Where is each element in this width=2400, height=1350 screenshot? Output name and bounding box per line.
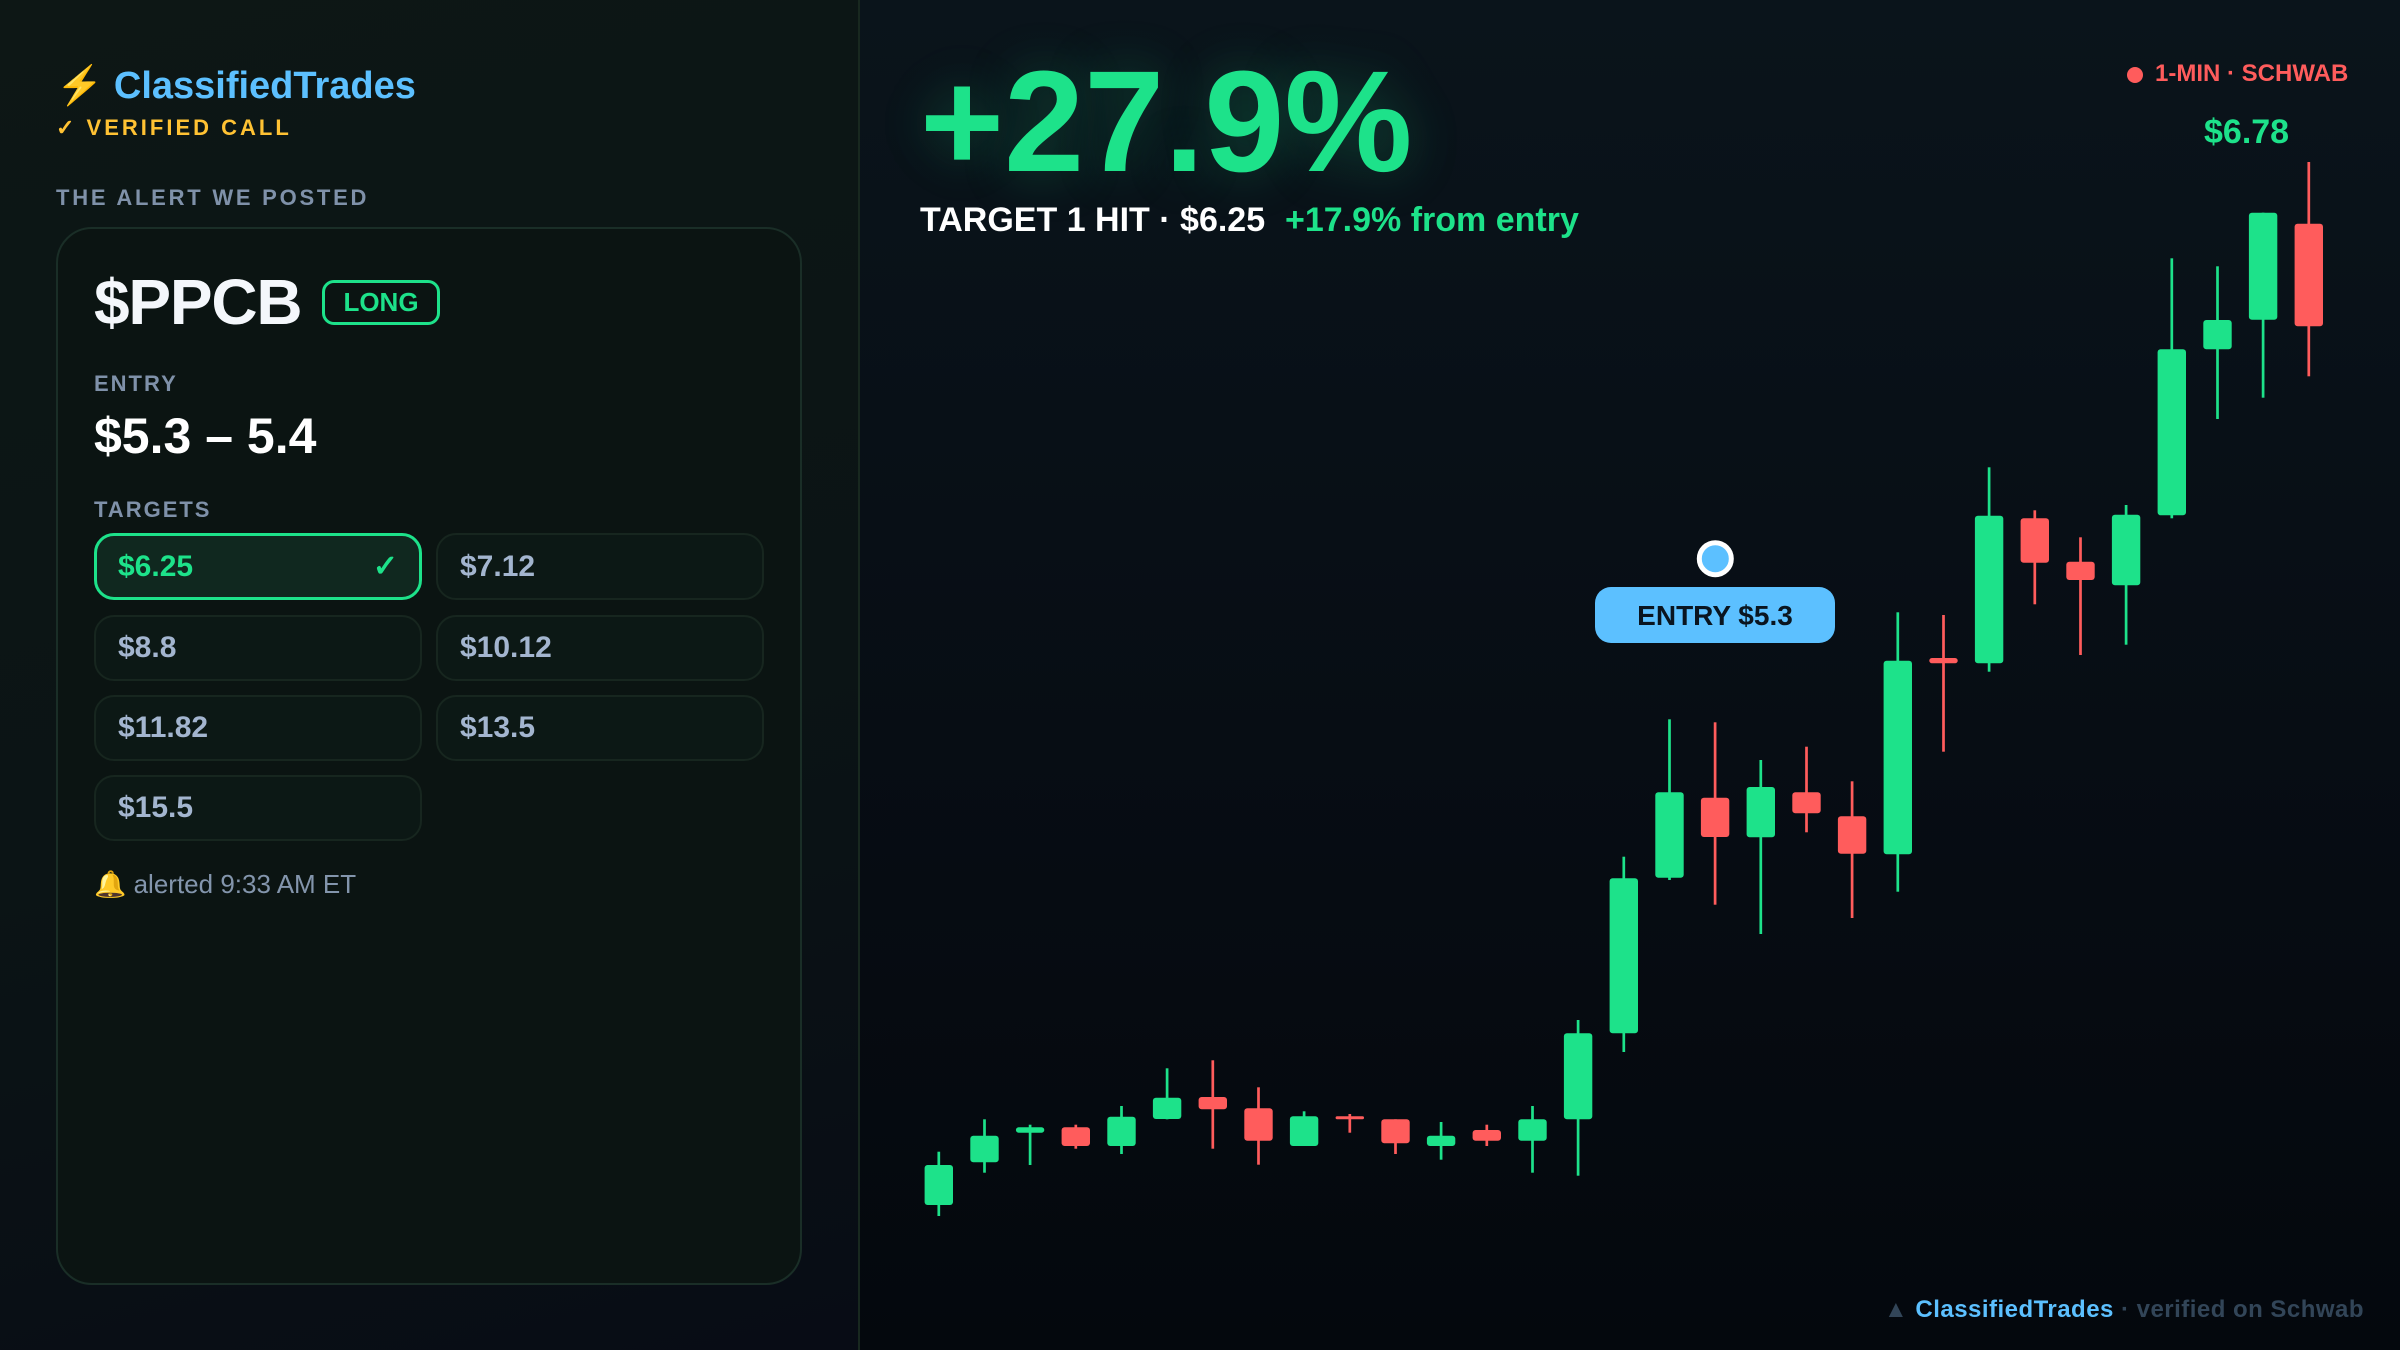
alert time: 🔔 alerted 9:33 AM ET [94,869,356,899]
target hit line: TARGET 1 HIT · $6.25 [920,201,1265,239]
panel: alert card [56,227,802,1285]
target 7 [94,775,422,841]
target 2 [436,533,764,600]
target 3 [94,615,422,681]
target 6: $13.5 [460,710,535,744]
green candles [925,213,2277,1216]
entry price label [1595,587,1835,643]
target 6 [436,695,764,761]
targets label: TARGETS [94,497,211,522]
gain from entry: +17.9% from entry [1285,201,1579,239]
entry label: ENTRY [94,371,178,396]
entry value: $5.3 – 5.4 [94,408,316,464]
target 1: hit: ✓ [373,550,398,583]
target 3: $8.8 [118,630,176,664]
badge: long: LONG [343,286,419,316]
entry marker dot [1699,543,1731,575]
headline gain: +27.9% [920,41,1412,202]
red candles [1062,162,2323,1165]
target 4: $10.12 [460,630,552,664]
icon: live dot [2127,67,2143,83]
verified call tag: ✓ VERIFIED CALL [56,115,292,140]
right stage background [858,0,2400,1350]
target 1: hit [94,533,422,600]
source tag: 1-MIN · SCHWAB [2155,60,2348,87]
footer credit: ▲ ClassifiedTrades · verified on Schwab [1884,1296,2364,1323]
target 4 [436,615,764,681]
target 5 [94,695,422,761]
badge: long [322,280,440,325]
target 1: hit: $6.25 [118,550,193,583]
last price: $6.78 [2204,113,2289,151]
left panel background [0,0,860,1350]
target 5: $11.82 [118,710,208,744]
target 2: $7.12 [460,550,535,583]
entry price label: ENTRY $5.3 [1637,600,1793,631]
ticker: $PPCB [94,266,301,338]
target 7: $15.5 [118,790,193,824]
section heading: the alert we posted: THE ALERT WE POSTED [56,185,369,210]
brand title: ⚡ ClassifiedTrades [56,65,416,107]
